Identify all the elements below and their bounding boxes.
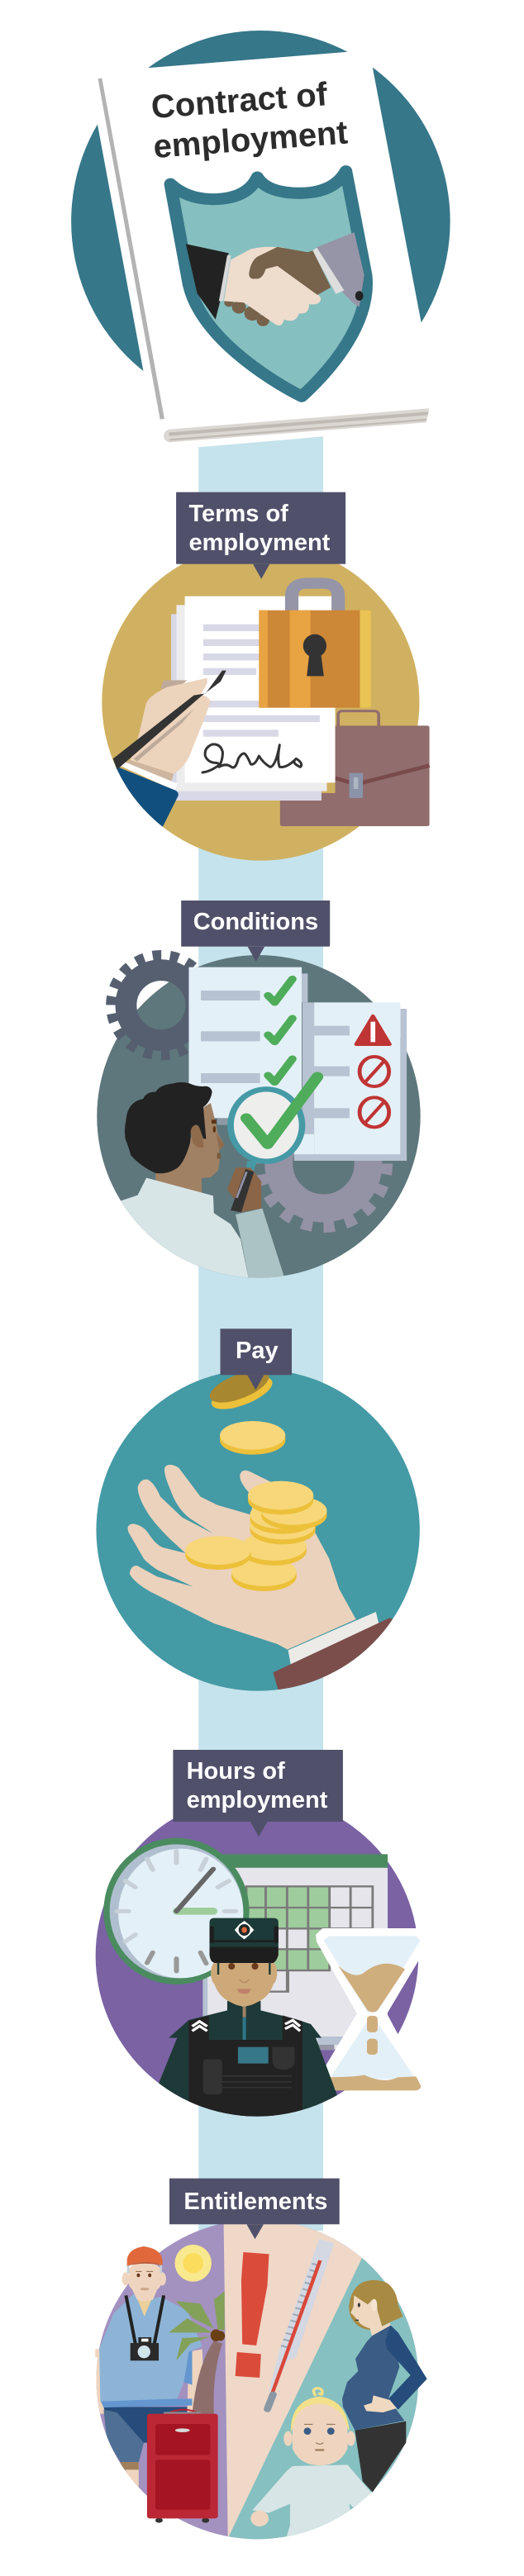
gear: upper left (111, 955, 212, 1055)
thermometer (267, 2239, 334, 2409)
paper stack (171, 596, 336, 801)
panel: entitlements (93, 2217, 435, 2550)
page stack edge (164, 408, 429, 442)
segmented circle (96, 2224, 418, 2540)
baby (250, 2388, 371, 2550)
suitcase (147, 2410, 218, 2523)
title: Contract of (150, 76, 329, 126)
handshake (186, 232, 364, 326)
shield (170, 171, 366, 397)
tourist (95, 2246, 204, 2495)
padlock (259, 583, 371, 708)
label: terms of employment: employment (188, 530, 331, 556)
gear: lower right (260, 1100, 387, 1227)
label: pay: Pay (236, 1338, 279, 1364)
hourglass (316, 1928, 422, 2090)
label: conditions (181, 901, 330, 962)
title: employment (152, 115, 349, 165)
teal circle (96, 1369, 420, 1691)
label: hours of employment (173, 1750, 343, 1837)
police officer (159, 1918, 337, 2121)
label: entitlements: Entitlements (183, 2189, 327, 2215)
teal background circle (71, 31, 450, 412)
magnifier with large tick (231, 1077, 317, 1162)
panel: terms of employment (100, 544, 430, 861)
label: hours of employment: Hours of (187, 1758, 285, 1785)
gold circle (102, 544, 419, 861)
coin stack (185, 1481, 326, 1591)
timeline strip (198, 436, 323, 2231)
palm tree (169, 2291, 225, 2414)
clock (103, 1838, 250, 1984)
label: hours of employment: employment (187, 1787, 328, 1813)
panel: pay (96, 1364, 420, 1691)
panel: conditions (97, 955, 421, 1281)
jacket sleeve (273, 1618, 401, 1691)
signature (202, 744, 302, 772)
pregnant woman (342, 2280, 427, 2493)
person with magnifying glass (121, 1082, 284, 1277)
purple circle (96, 1795, 418, 2117)
checklist page (188, 967, 307, 1125)
page spine line (98, 78, 164, 420)
label: pay (220, 1328, 292, 1390)
exclamation mark (236, 2252, 269, 2378)
sun (174, 2245, 212, 2282)
hand (128, 1465, 356, 1650)
label: entitlements (169, 2179, 340, 2239)
contract page (88, 50, 438, 423)
panel: contract of employment (71, 31, 450, 442)
calendar (202, 1854, 388, 2059)
warnings page (294, 1002, 407, 1161)
briefcase (280, 711, 430, 826)
label: terms of employment (176, 492, 345, 579)
label: terms of employment: Terms of (188, 501, 288, 527)
title (149, 75, 349, 165)
panel: hours of employment (96, 1795, 422, 2121)
falling coin (220, 1421, 285, 1455)
grey-green circle (97, 955, 421, 1278)
flipped coin (204, 1364, 278, 1416)
hand with pen (100, 671, 226, 827)
label: conditions: Conditions (193, 909, 318, 935)
infographic canvas (71, 31, 450, 2540)
shirt cuff (288, 1612, 379, 1665)
